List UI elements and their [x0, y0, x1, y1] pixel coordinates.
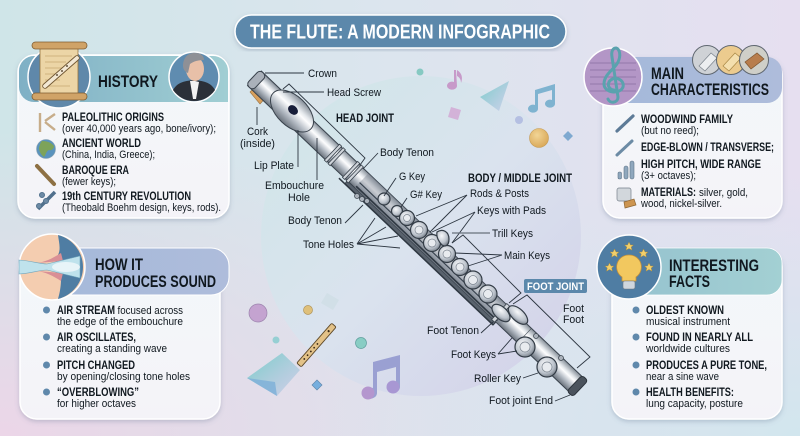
characteristics header band — [625, 57, 782, 103]
item: overblowing — [57, 386, 139, 410]
flute labels: BODY / MIDDLE JOINT — [468, 172, 572, 185]
icon: baroque flute — [37, 166, 54, 184]
flute labels: HEAD JOINT — [336, 112, 394, 125]
flute labels: Embouchure — [265, 180, 324, 192]
icon: bones — [40, 113, 55, 132]
characteristics heading — [651, 64, 769, 99]
item: high pitch — [641, 158, 761, 182]
item: materials: wood, nickel-silver. — [640, 198, 722, 210]
small wooden flute — [297, 323, 336, 367]
icon: treble clef — [584, 48, 642, 106]
facts heading: INTERESTING — [669, 256, 759, 275]
flute labels: Lip Plate — [254, 160, 294, 172]
facts heading: FACTS — [669, 272, 710, 291]
icon: portrait of Theobald Boehm — [169, 52, 219, 102]
item: health benefits — [646, 386, 743, 410]
panel: history — [18, 42, 229, 218]
item: high pitch: HIGH PITCH, WIDE RANGE — [641, 158, 761, 171]
item: paleolithic origins: PALEOLITHIC ORIGINS — [62, 111, 164, 124]
icon: scroll with bone flute — [28, 42, 90, 108]
flute labels: Tone Holes — [303, 239, 354, 251]
item: air oscillates: creating a standing wave — [57, 343, 167, 355]
item: overblowing: “OVERBLOWING” — [57, 386, 139, 399]
item: air stream — [57, 304, 183, 328]
item: woodwind family — [641, 113, 733, 137]
flute illustration — [243, 69, 588, 399]
bullets — [43, 306, 50, 396]
history header band — [19, 56, 228, 102]
icon: woodwind — [617, 116, 633, 131]
small posts — [354, 194, 564, 360]
panel: interesting facts — [597, 235, 782, 419]
icon: range bars — [618, 161, 634, 179]
panel: how it produces sound — [19, 234, 229, 419]
item: oldest known: OLDEST KNOWN — [646, 304, 724, 317]
flute labels: Foot Tenon — [427, 325, 479, 337]
background disc — [261, 76, 581, 396]
item: air stream: AIR STREAM — [57, 304, 115, 317]
facts heading — [669, 256, 759, 291]
icon: light bulb with stars — [597, 235, 661, 299]
item: woodwind family: (but no reed); — [641, 125, 699, 137]
item: pure tone: PRODUCES A PURE TONE, — [646, 359, 767, 372]
flute labels: Body Tenon — [288, 215, 342, 227]
icon: material samples — [692, 46, 768, 74]
item: baroque era — [62, 164, 129, 188]
flute labels: Crown — [308, 68, 337, 80]
sound heading — [95, 255, 216, 291]
item: 19th century revolution: (Theobald Boehm design, keys, rods). — [62, 202, 221, 214]
cork — [250, 85, 268, 104]
item: pure tone: near a sine wave — [646, 371, 719, 383]
sound heading: HOW IT — [95, 255, 143, 274]
facts header band — [630, 248, 782, 295]
flute labels: Head Screw — [327, 87, 382, 99]
flute labels: Cork — [247, 126, 268, 138]
icon: globe — [36, 140, 56, 158]
item: pitch changed: by opening/closing tone holes — [57, 371, 190, 383]
item: materials: silver, gold, — [699, 187, 748, 199]
item: found in nearly all — [645, 331, 753, 355]
item: air oscillates — [57, 331, 167, 355]
flute labels: G# Key — [410, 189, 442, 201]
item: materials: MATERIALS: — [641, 186, 696, 199]
item: ancient world: (China, India, Greece); — [62, 149, 155, 161]
history heading: HISTORY — [98, 72, 159, 91]
item: pure tone — [646, 359, 767, 383]
icon: lips and air stream — [19, 234, 85, 300]
item: pitch changed — [57, 359, 190, 383]
flute labels: Body Tenon — [380, 147, 434, 159]
item: pitch changed: PITCH CHANGED — [57, 359, 135, 372]
panel: main characteristics — [584, 46, 782, 218]
decorative music elements — [247, 68, 573, 400]
flute labels: Foot joint End — [489, 395, 553, 407]
item: baroque era: (fewer keys); — [62, 176, 116, 188]
flute labels: Keys with Pads — [477, 205, 546, 217]
leader lines — [257, 73, 590, 401]
item: ancient world: ANCIENT WORLD — [62, 137, 141, 150]
title: THE FLUTE: A MODERN INFOGRAPHIC — [250, 22, 550, 44]
item: health benefits: HEALTH BENEFITS: — [646, 386, 734, 399]
item: air stream: the edge of the embouchure — [57, 316, 183, 328]
foot joint tag: FOOT JOINT — [527, 281, 584, 293]
flute labels: Foot — [563, 303, 585, 315]
icon: transverse — [617, 141, 632, 155]
item: paleolithic origins — [62, 111, 216, 135]
title — [235, 15, 566, 48]
lip plate — [263, 82, 321, 140]
flute labels: Trill Keys — [492, 228, 533, 240]
flute labels: Roller Key — [474, 373, 521, 385]
item: air oscillates: AIR OSCILLATES, — [57, 331, 136, 344]
icon: boehm keywork — [36, 192, 55, 209]
keys — [378, 193, 557, 377]
characteristics heading: MAIN — [651, 64, 684, 83]
flute labels: Hole — [288, 192, 310, 204]
embouchure hole — [286, 103, 300, 117]
flute labels — [240, 68, 585, 407]
item: woodwind family: WOODWIND FAMILY — [641, 113, 733, 126]
flute labels: G Key — [399, 171, 425, 183]
item: paleolithic origins: (over 40,000 years ago, bone/ivory); — [62, 123, 216, 135]
item: 19th century revolution: 19th CENTURY REVOLUTION — [62, 190, 191, 203]
flute labels: Foot — [563, 314, 585, 326]
item: overblowing: for higher octaves — [57, 398, 136, 410]
item: materials — [640, 186, 748, 210]
item: high pitch: (3+ octaves); — [641, 170, 696, 182]
item: baroque era: BAROQUE ERA — [62, 164, 129, 177]
flute labels: Foot Keys — [451, 349, 496, 361]
flute tube — [243, 69, 588, 399]
item: found in nearly all: FOUND IN NEARLY ALL — [646, 331, 753, 344]
bullets — [632, 306, 640, 396]
flute labels: Rods & Posts — [470, 188, 529, 200]
item: oldest known — [646, 304, 731, 328]
item: ancient world — [62, 137, 155, 161]
flute labels: (inside) — [240, 138, 275, 150]
item: 19th century revolution — [62, 190, 221, 214]
item: found in nearly all: worldwide cultures — [645, 343, 730, 355]
flute labels: Main Keys — [504, 250, 550, 262]
item: health benefits: lung capacity, posture — [646, 398, 743, 410]
sound header band — [50, 248, 229, 295]
key centres — [404, 214, 552, 372]
sound heading: PRODUCES SOUND — [95, 272, 216, 291]
item: air stream: focused across — [118, 305, 183, 317]
item: oldest known: musical instrument — [646, 316, 731, 328]
icon: material blocks — [617, 188, 636, 208]
